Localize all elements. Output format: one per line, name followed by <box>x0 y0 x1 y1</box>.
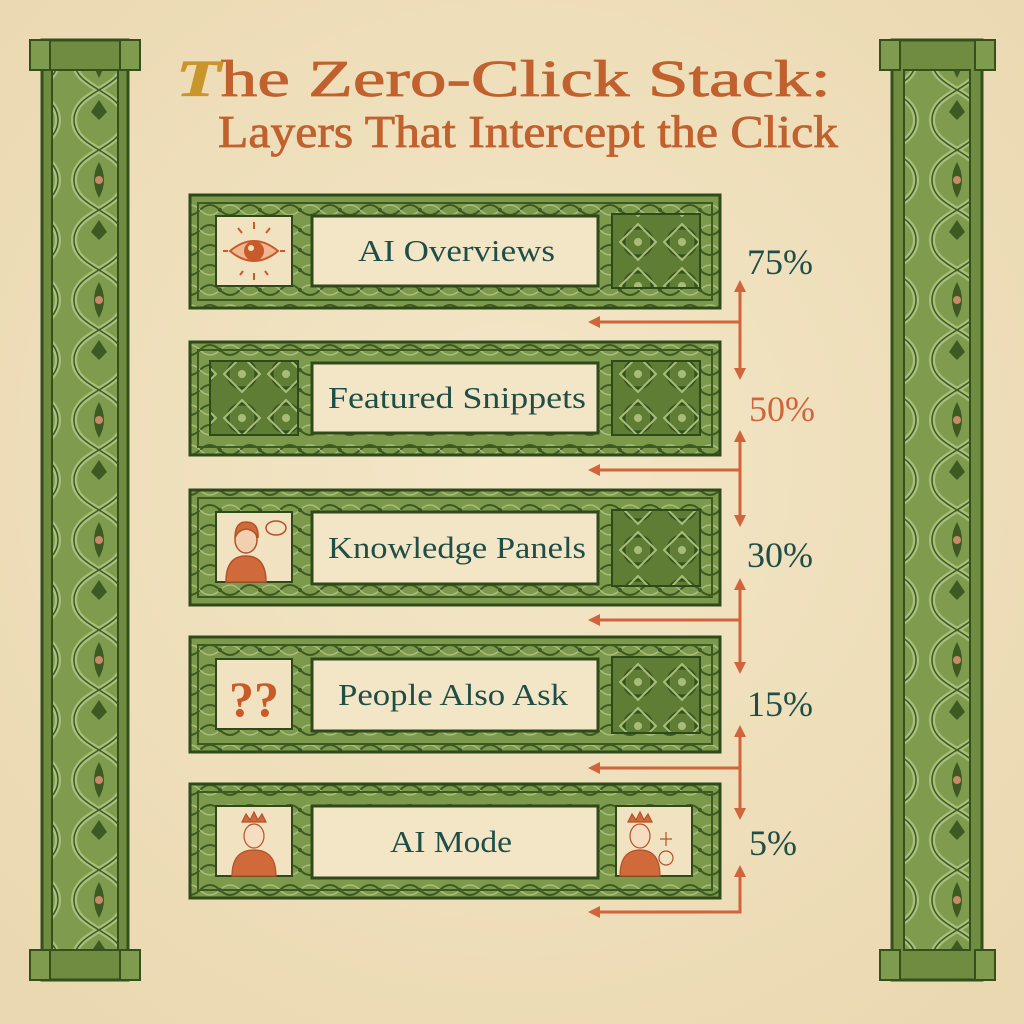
panel: Featured Snippets: Featured Snippets <box>328 380 586 415</box>
panel: AI Mode: AI Mode <box>390 824 512 859</box>
arrows <box>588 280 746 918</box>
percentages: 5% <box>749 823 797 863</box>
panel: Knowledge Panels: Knowledge Panels <box>328 530 586 565</box>
title <box>176 51 838 157</box>
right ornamental column <box>880 40 995 980</box>
panel: AI Mode <box>190 784 720 898</box>
percentages: 75% <box>747 242 813 282</box>
icon: queen left <box>232 812 276 876</box>
panel: Knowledge Panels <box>190 490 720 605</box>
icon: queen right <box>620 812 673 876</box>
left ornamental column <box>30 40 140 980</box>
percentages: 50% <box>749 389 815 429</box>
percentages <box>747 242 815 863</box>
icon: person with speech bubble <box>226 521 286 582</box>
panel: AI Overviews <box>190 195 720 308</box>
percentages: 15% <box>747 684 813 724</box>
percentages: 30% <box>747 535 813 575</box>
panel: People Also Ask <box>190 637 720 752</box>
icon: question marks: ?? <box>229 671 279 727</box>
title: Layers That Intercept the Click <box>218 106 838 157</box>
panel: People Also Ask: People Also Ask <box>338 677 569 712</box>
panel: Featured Snippets <box>190 342 720 455</box>
title: The Zero-Click Stack: <box>176 51 831 108</box>
icon: eye <box>223 222 285 280</box>
panel: AI Overviews: AI Overviews <box>358 233 555 268</box>
